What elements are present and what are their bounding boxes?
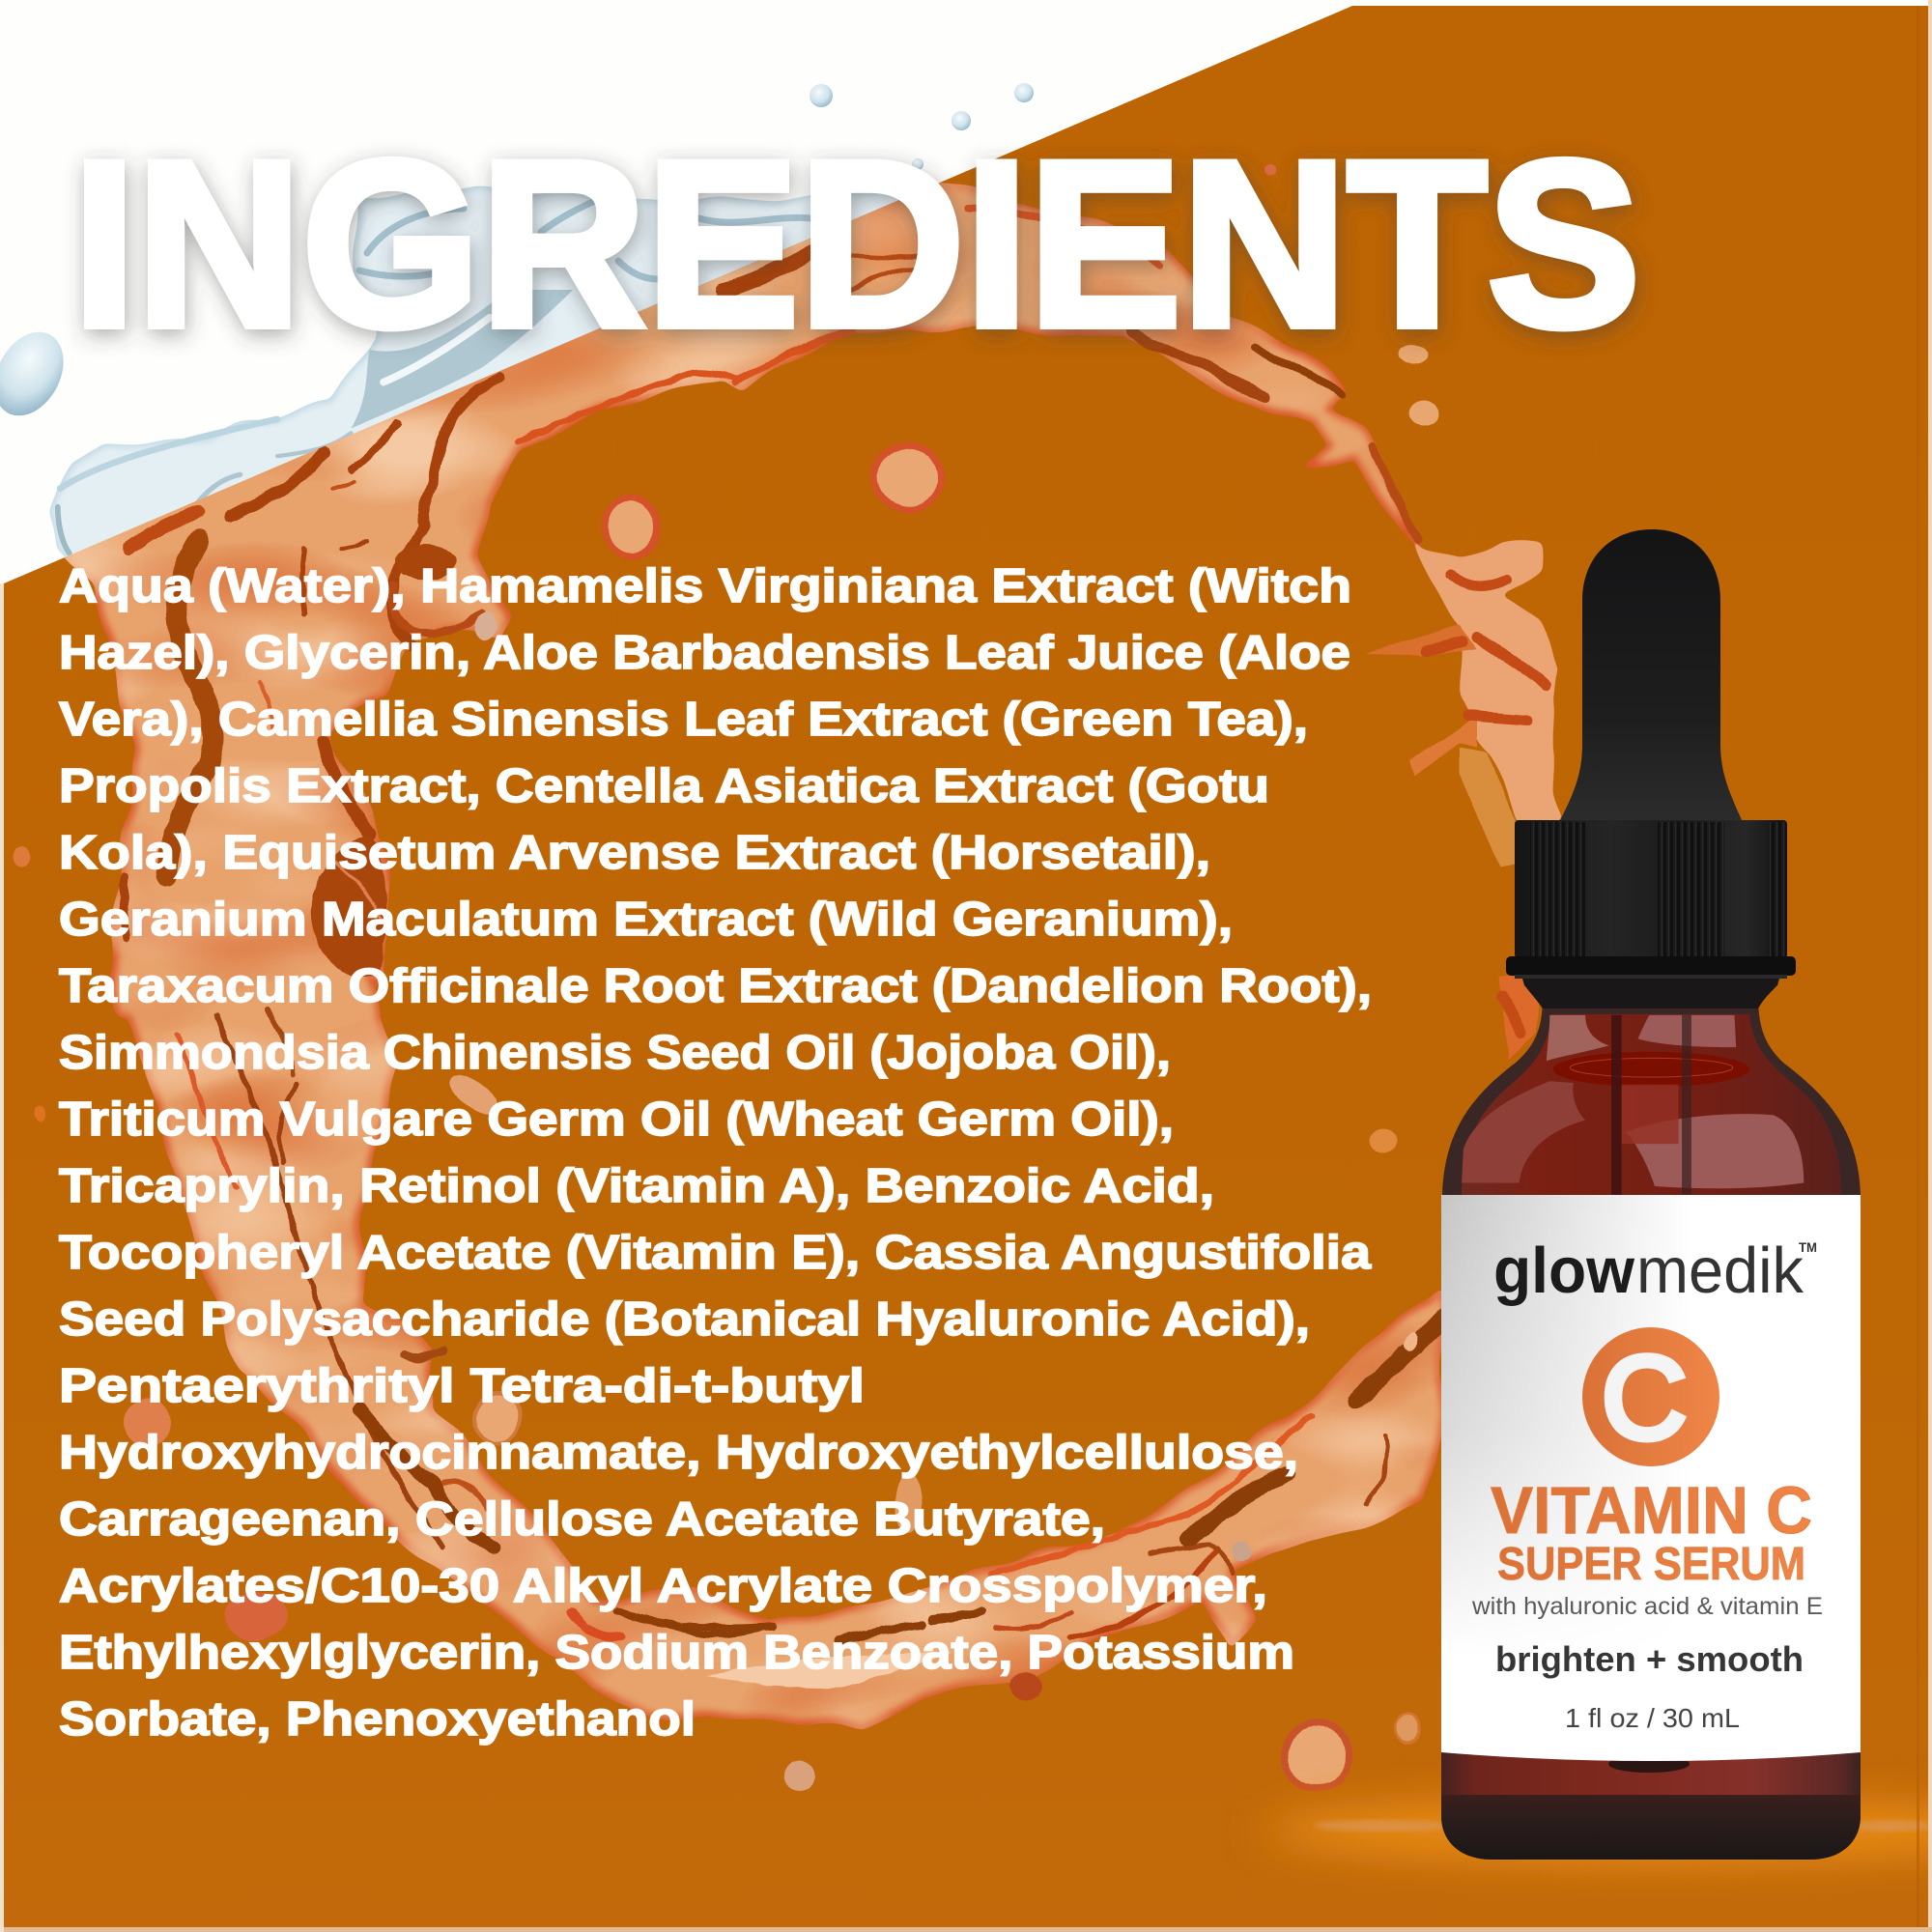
- lower amber band: [1441, 1748, 1861, 1799]
- brand name: glow: [1493, 1235, 1635, 1307]
- amber liquid: [1462, 1014, 1841, 1195]
- rubber dropper bulb: [1559, 529, 1743, 822]
- ingredients list: Tricaprylin, Retinol (Vitamin A), Benzoic Acid,: [59, 1160, 1214, 1212]
- ingredients list: [59, 560, 1372, 1746]
- water blob left: [0, 320, 77, 428]
- ingredients list: Hazel), Glycerin, Aloe Barbadensis Leaf Juice (Aloe: [59, 627, 1350, 679]
- ingredients list: Simmondsia Chinensis Seed Oil (Jojoba Oil),: [59, 1027, 1171, 1079]
- ingredients list: Pentaerythrityl Tetra-di-t-butyl: [59, 1360, 865, 1412]
- splash streaks lower left: [178, 1010, 773, 1637]
- splash streaks upper left: [124, 373, 739, 977]
- label shading: [1441, 1195, 1656, 1607]
- ingredients list: Seed Polysaccharide (Botanical Hyaluronic Acid),: [59, 1293, 1310, 1346]
- brand name: [1493, 1235, 1817, 1307]
- ingredients list: Sorbate, Phenoxyethanol: [59, 1693, 696, 1746]
- brand name: TM: [1799, 1239, 1817, 1255]
- glass body: [1441, 995, 1861, 1860]
- ingredients list: Carrageenan, Cellulose Acetate Butyrate,: [59, 1493, 1105, 1546]
- orange liquid splash ring: [51, 184, 1445, 1726]
- splash head beside dropper: [1367, 483, 1563, 1060]
- floor glow under bottle: [1264, 1800, 1932, 1861]
- ribbed cap: [1506, 820, 1796, 979]
- vitamin c heading: VITAMIN C: [1491, 1473, 1812, 1548]
- splash streaks bottom right: [676, 1317, 1445, 1688]
- icon: vitamin C badge: C: [1602, 1332, 1687, 1463]
- ingredients list: Taraxacum Officinale Root Extract (Dandelion Root),: [59, 960, 1372, 1012]
- water droplets: [810, 83, 1034, 170]
- ingredients list: Triticum Vulgare Germ Oil (Wheat Germ Oil),: [59, 1094, 1174, 1146]
- ingredients list: Aqua (Water), Hamamelis Virginiana Extract (Witch: [59, 560, 1351, 612]
- ingredients list: Geranium Maculatum Extract (Wild Geranium),: [59, 894, 1233, 946]
- subtitle: with hyaluronic acid & vitamin E: [1471, 1593, 1823, 1620]
- label: [1441, 1195, 1861, 1761]
- ingredients list: Kola), Equisetum Arvense Extract (Horsetail),: [59, 827, 1210, 879]
- super serum heading: SUPER SERUM: [1497, 1539, 1805, 1590]
- neck collar: [1520, 972, 1781, 1009]
- ingredients list: Tocopheryl Acetate (Vitamin E), Cassia Angustifolia: [59, 1227, 1372, 1279]
- dropper tube shadow: [1608, 1755, 1690, 1773]
- bottle base: [1441, 1795, 1861, 1860]
- ingredients list: Propolis Extract, Centella Asiatica Extract (Gotu: [59, 760, 1269, 812]
- benefit line: brighten + smooth: [1495, 1639, 1804, 1679]
- glass highlights: [1462, 1015, 1804, 1195]
- ingredients list: Ethylhexylglycerin, Sodium Benzoate, Potassium: [59, 1627, 1294, 1679]
- ingredients list: Hydroxyhydrocinnamate, Hydroxyethylcellulose,: [59, 1427, 1298, 1479]
- ingredients list: Vera), Camellia Sinensis Leaf Extract (Green Tea),: [59, 694, 1308, 746]
- product bottle: [1441, 529, 1861, 1860]
- ingredients list: Acrylates/C10-30 Alkyl Acrylate Crosspolymer,: [59, 1560, 1267, 1612]
- volume: 1 fl oz / 30 mL: [1565, 1703, 1740, 1733]
- orange droplets: [13, 165, 1438, 1791]
- splash streaks top arc: [724, 208, 1418, 541]
- title: INGREDIENTS: [72, 111, 1640, 376]
- water splash over white area: [50, 185, 898, 557]
- icon: vitamin C badge: [1582, 1327, 1719, 1466]
- brand name: medik: [1636, 1235, 1804, 1307]
